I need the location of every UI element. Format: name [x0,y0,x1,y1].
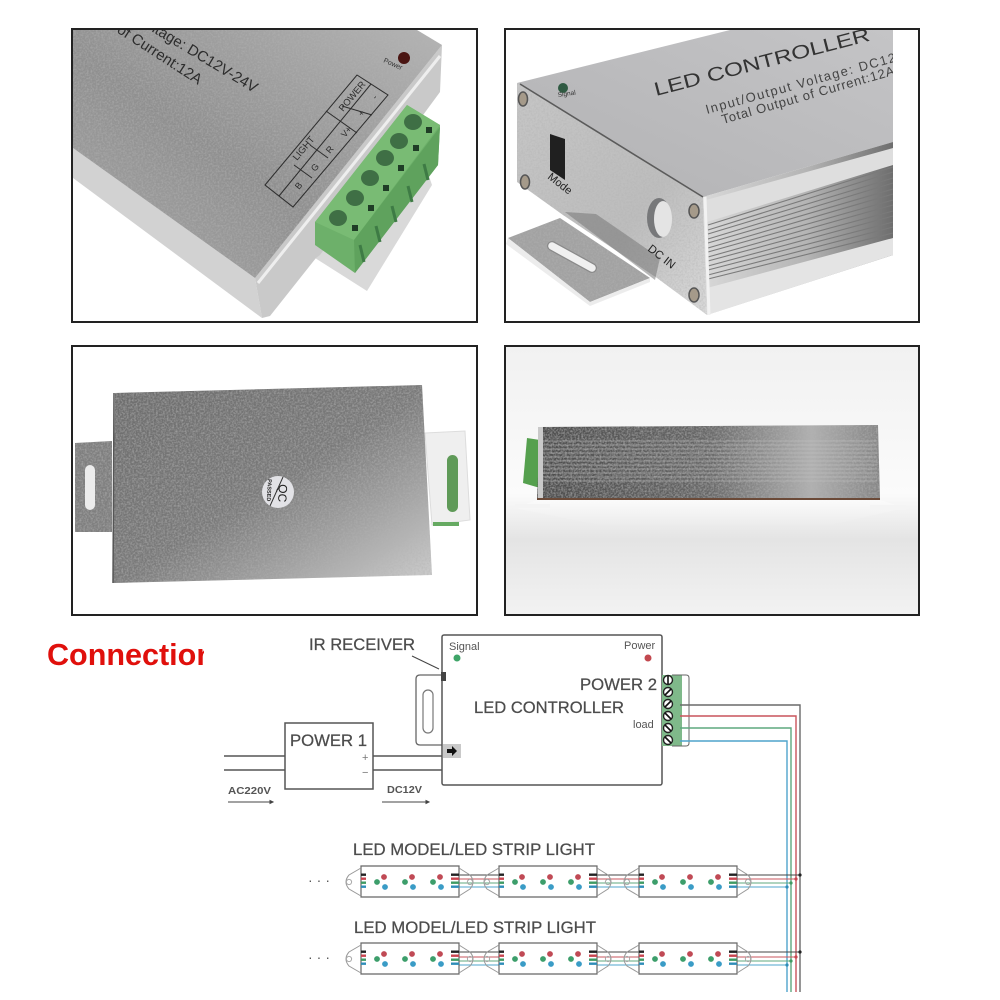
power LED caption: Power [382,57,404,72]
wiring diagram [224,635,802,992]
plus and minus marks [362,752,368,779]
IR receiver label: IR RECEIVER [309,636,415,654]
mounting plate under terminal [316,176,432,291]
signal LED [558,83,568,93]
row 1 module C [624,866,751,897]
controller mounting tab [416,675,442,745]
frame [72,346,477,615]
POWER 1 box [285,723,373,789]
terminal grid labels: POWER [337,79,368,114]
terminal grid labels: R [324,143,336,155]
plus and minus marks: − [362,767,368,779]
left end cap [538,427,543,500]
terminal grid labels [291,79,379,191]
heading: Connection: Connection [47,637,215,672]
terminal grid labels: LIGHT [291,134,317,163]
mode slot [550,134,565,180]
terminal grid labels: + [356,108,367,118]
row 1 junction dots [785,873,802,889]
lower edge [537,498,880,500]
signal label: Signal [449,641,480,653]
controller side wall [73,148,262,318]
top surface [517,30,893,197]
QC sticker: PASSED [265,479,272,501]
IR receiver block [441,672,446,681]
AC input lines [224,756,285,770]
row 2 wires [459,952,800,965]
frame [72,29,477,322]
row 1 dots: ··· [308,872,334,888]
power LED [398,52,410,64]
plus and minus marks: + [362,752,368,764]
strip row 2 label: LED MODEL/LED STRIP LIGHT [354,919,596,937]
AC arrow [228,800,273,804]
left edge shadow [113,393,114,583]
controller end wall [255,45,442,318]
frame [505,29,919,322]
voltage spec line: Input/Output Voltage: DC12V-24V [704,38,940,117]
signal caption: Signal [557,89,577,99]
corner post [705,197,709,315]
QC sticker [262,476,294,508]
terminal grid labels: G [309,161,321,173]
load label: load [633,719,654,731]
row 1 module B [484,866,611,897]
controller top surface [73,30,442,278]
strip row 1 [308,866,802,897]
panel: input end photo [505,25,940,322]
output wires [680,705,800,992]
panel: side profile photo [505,346,919,615]
end face [517,83,707,315]
controller box [442,635,662,785]
bright top edge highlight [258,56,440,283]
mounting bracket [506,218,650,306]
row 1 wires [459,875,800,887]
LED CONTROLLER label: LED CONTROLLER [474,698,624,717]
input arrow box [443,744,461,758]
screws [518,92,699,302]
ribbed side wall [703,142,893,315]
signal LED [454,654,460,662]
POWER 1 label: POWER 1 [290,731,367,750]
POWER 2 label: POWER 2 [580,675,657,694]
DC IN caption: DC IN [645,243,677,272]
current spec line: Total Output of Current:12A [720,63,897,127]
terminal grid labels: - [370,93,379,101]
ribs [541,441,877,481]
AC220V label: AC220V [228,785,271,797]
mode caption: Mode [545,171,574,197]
row 2 module B [484,943,611,974]
LED CONTROLLER heading: LED CONTROLLER [652,25,872,101]
right tab [425,431,470,526]
frame [505,346,919,615]
row 2 module A [346,943,473,974]
row 2 module C [624,943,751,974]
soft bottom body [515,500,905,525]
base plate [113,385,432,583]
white cut-off on right [893,47,918,234]
terminal label grid [265,75,388,207]
green terminal block [315,105,440,273]
face top seam [520,84,703,197]
brackets [515,504,906,510]
row 2 dots: ··· [308,949,334,965]
power label: Power [624,640,656,652]
terminal block [662,675,689,746]
QC sticker: QC [275,484,290,503]
green terminal [523,438,540,488]
backdrop [506,347,918,614]
bracket shadow on face [565,212,660,280]
DC arrow [382,800,429,804]
terminal grid labels: B [293,180,304,191]
row 1 module A [346,866,473,897]
terminal grid labels: V+ [339,124,354,139]
strip row 2 [308,943,802,974]
DC12V label: DC12V [387,784,422,796]
DC IN socket [647,198,672,238]
power LED [644,654,652,662]
aluminium bar [537,425,880,500]
DC lines [373,756,442,770]
panel: underside photo [72,346,477,615]
left tab [75,441,112,532]
row 2 junction dots [785,950,802,967]
panel: terminal end photo [71,28,478,323]
strip row 1 label: LED MODEL/LED STRIP LIGHT [353,841,595,859]
IR receiver leader line [412,656,439,669]
